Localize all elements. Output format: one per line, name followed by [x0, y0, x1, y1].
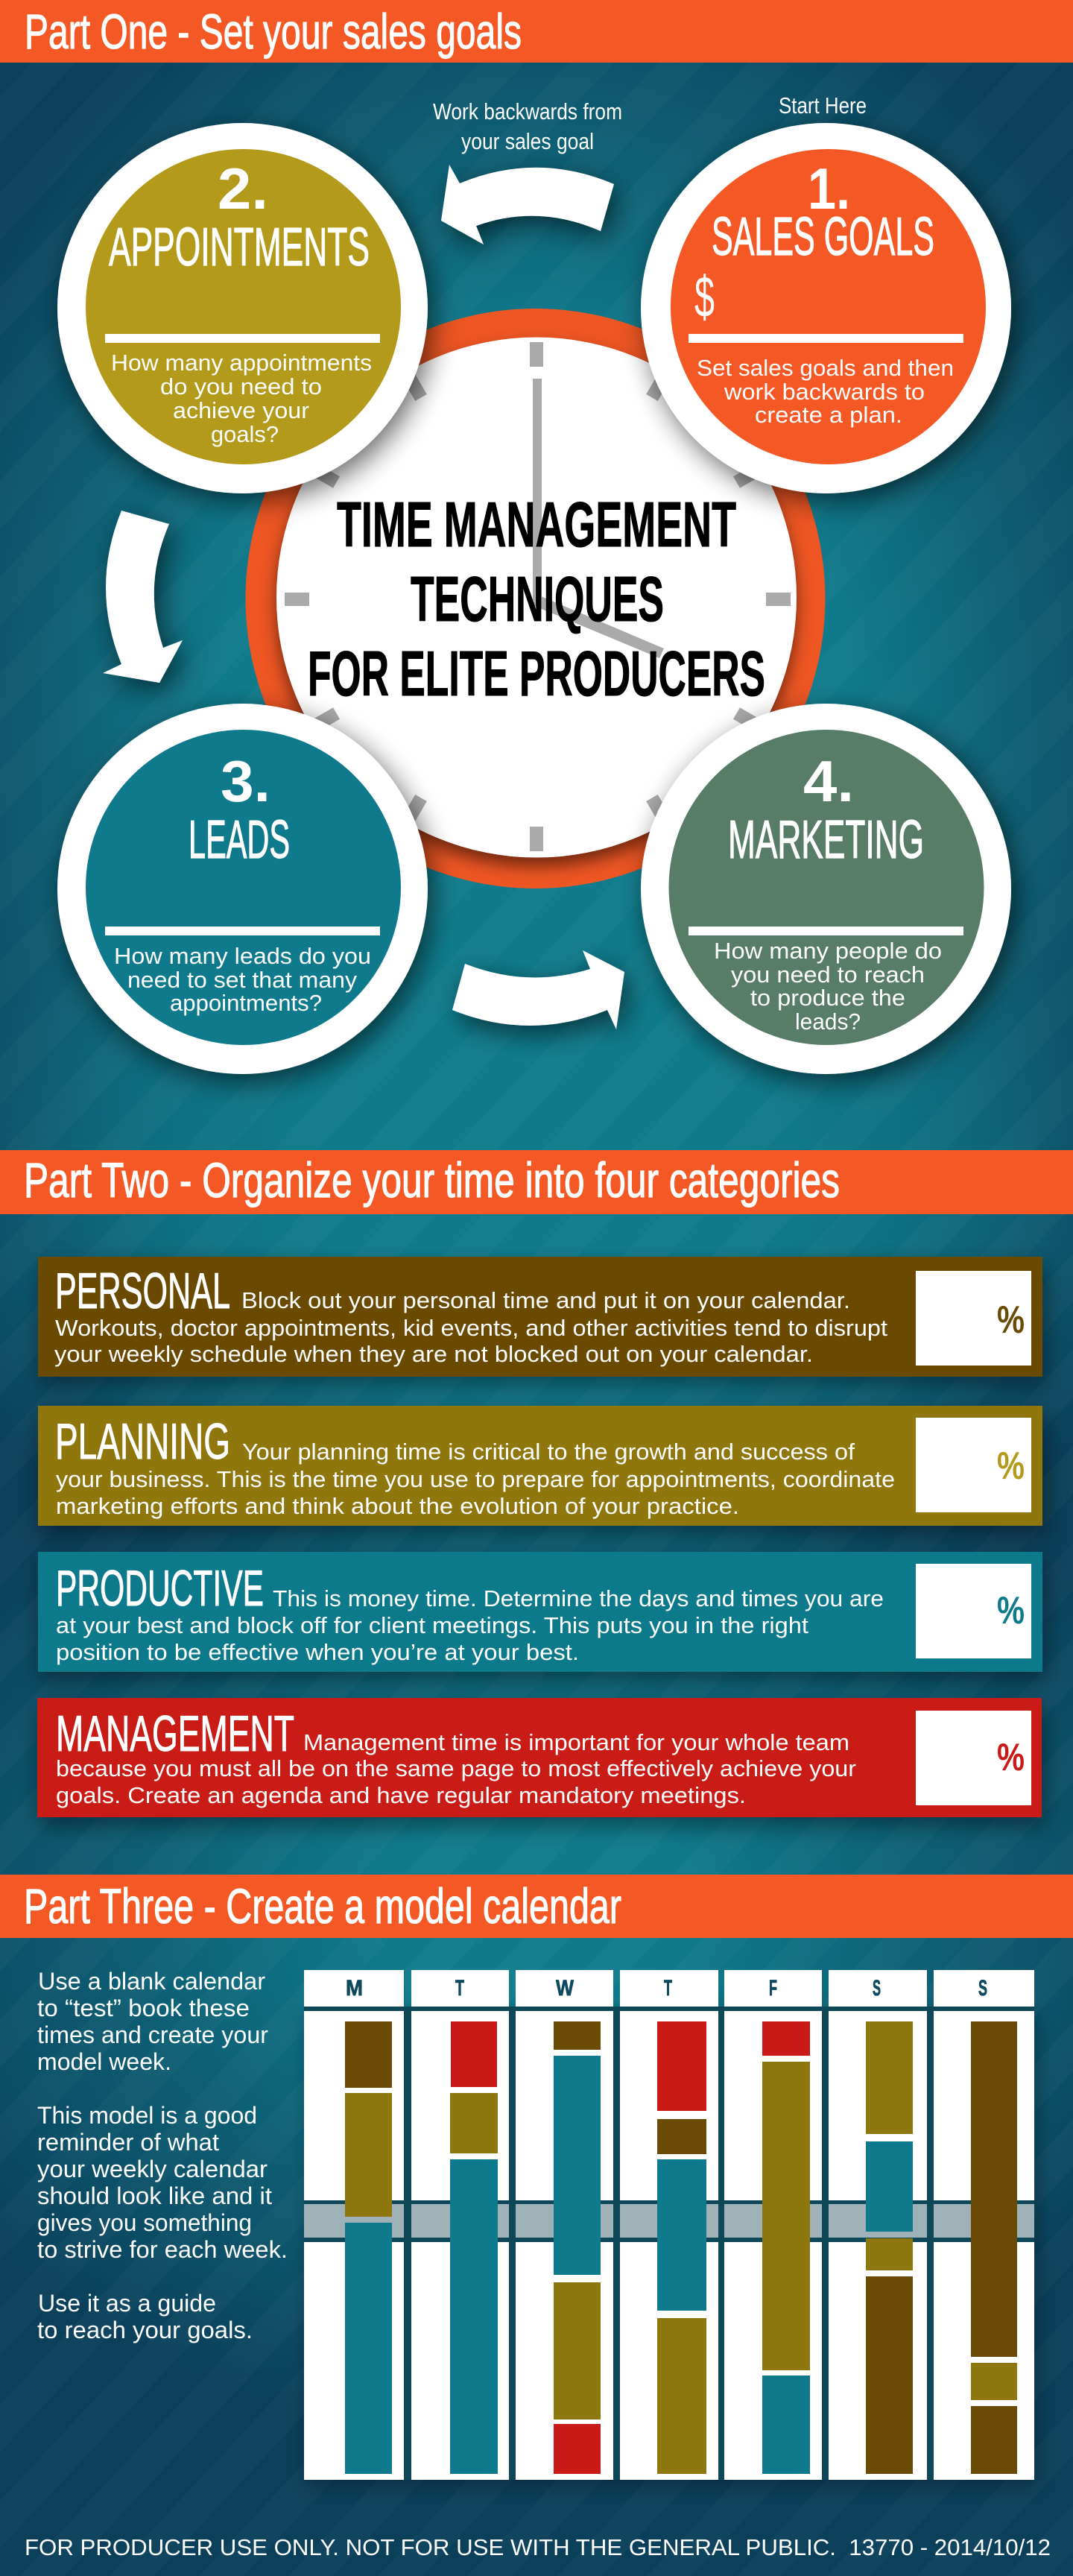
- model calendar: S: [978, 1976, 987, 2001]
- circle 1: sales goals: 1.: [808, 156, 850, 221]
- thursday bars: [657, 2021, 706, 2474]
- circle 1: sales goals: Set sales goals and then: [697, 355, 954, 381]
- panel: planning: PLANNING: [55, 1413, 230, 1470]
- panel: productive: position to be effective when you’re at your best.: [56, 1639, 579, 1665]
- panel: personal: [38, 1257, 1042, 1377]
- circle 3: leads: How many leads do you: [114, 943, 371, 969]
- saturday bars: [866, 2021, 913, 2474]
- circle 2: appointments: APPOINTMENTS: [109, 218, 370, 277]
- circle 4: marketing: 4.: [803, 748, 854, 814]
- circle 2: appointments: goals?: [211, 421, 279, 447]
- clock title: [308, 490, 765, 710]
- text: calendar instructions: gives you something: [37, 2209, 252, 2236]
- arrow: goals to appointments: [441, 165, 614, 244]
- note: work backwards: your sales goal: [461, 128, 594, 154]
- circle 4: marketing: you need to reach: [731, 962, 925, 988]
- circle 1: sales goals: create a plan.: [755, 402, 902, 428]
- circle 1: sales goals: work backwards to: [724, 379, 925, 405]
- text: calendar instructions: reminder of what: [37, 2129, 219, 2156]
- note: start here: Start Here: [779, 92, 867, 119]
- text: calendar instructions: should look like and it: [37, 2182, 272, 2209]
- panel: planning: Your planning time is critical to the growth and success of: [242, 1439, 855, 1465]
- clock title: FOR ELITE PRODUCERS: [308, 639, 765, 710]
- panel: management: because you must all be on the same page to most effectively achieve your: [56, 1755, 856, 1781]
- clock: [246, 309, 826, 888]
- note: work backwards: Work backwards from: [433, 98, 622, 124]
- circle 4: marketing: leads?: [795, 1008, 861, 1035]
- header: part one: [0, 0, 1073, 63]
- model calendar: S: [873, 1976, 881, 2001]
- panel: productive: [38, 1552, 1042, 1672]
- panel: planning: %: [997, 1445, 1025, 1488]
- circle 4: marketing: MARKETING: [728, 810, 924, 870]
- circle 3: leads: 3.: [221, 748, 270, 814]
- circle 1: sales goals: [641, 123, 1011, 493]
- panel: management: MANAGEMENT: [56, 1705, 294, 1762]
- model calendar: [304, 1970, 1034, 2480]
- text: calendar instructions: to reach your goals.: [37, 2317, 253, 2343]
- text: calendar instructions: Use a blank calendar: [38, 1968, 265, 1995]
- text: calendar instructions: Use it as a guide: [38, 2290, 216, 2317]
- sunday bars: [971, 2021, 1017, 2474]
- text: calendar instructions: your weekly calendar: [37, 2156, 268, 2182]
- panel: personal: Block out your personal time and put it on your calendar.: [241, 1287, 850, 1313]
- header: part three: [0, 1875, 1073, 1938]
- circle 2: appointments: How many appointments: [111, 350, 372, 376]
- arrow: appointments to leads: [103, 511, 183, 683]
- clock title: TIME MANAGEMENT: [337, 490, 736, 561]
- model calendar: F: [769, 1976, 777, 2001]
- model calendar: T: [664, 1976, 672, 2001]
- model calendar: W: [556, 1976, 575, 2001]
- text: calendar instructions: This model is a good: [37, 2102, 257, 2129]
- note: work backwards: [433, 98, 622, 154]
- panel: personal: Workouts, doctor appointments, kid events, and other activities tend to disrupt: [55, 1315, 887, 1341]
- circle 3: leads: need to set that many: [127, 967, 358, 993]
- header: part one: Part One - Set your sales goals: [25, 4, 522, 59]
- circle 3: leads: appointments?: [170, 990, 322, 1016]
- circle 4: marketing: to produce the: [750, 985, 905, 1011]
- circle 2: appointments: [57, 123, 428, 493]
- panel: planning: marketing efforts and think about the evolution of your practice.: [56, 1493, 739, 1519]
- text: calendar instructions: to “test” book these: [37, 1995, 250, 2021]
- panel: planning: your business. This is the time you use to prepare for appointments, coordinate: [56, 1466, 895, 1492]
- circle 2: appointments: achieve your: [173, 397, 309, 423]
- panel: planning: [38, 1406, 1042, 1526]
- panel: productive: PRODUCTIVE: [56, 1560, 264, 1617]
- friday bars: [762, 2021, 810, 2474]
- text: calendar instructions: times and create your: [37, 2021, 268, 2048]
- panel: personal: PERSONAL: [55, 1263, 230, 1319]
- panel: management: %: [997, 1736, 1025, 1779]
- text: calendar instructions: model week.: [37, 2048, 171, 2075]
- panel: personal: %: [997, 1298, 1025, 1342]
- model calendar: T: [455, 1976, 464, 2001]
- footer disclaimer: FOR PRODUCER USE ONLY. NOT FOR USE WITH THE GENERAL PUBLIC. 13770 - 2014/10/12: [25, 2534, 1051, 2560]
- panel: management: goals. Create an agenda and have regular mandatory meetings.: [56, 1782, 746, 1808]
- monday bars: [345, 2021, 392, 2474]
- circle 2: appointments: 2.: [218, 156, 268, 221]
- tuesday bars: [450, 2021, 498, 2474]
- wednesday bars: [554, 2021, 601, 2474]
- text: calendar instructions: to strive for each week.: [37, 2236, 288, 2263]
- model calendar: M: [346, 1976, 363, 2001]
- panel: productive: at your best and block off for client meetings. This puts you in the right: [56, 1612, 808, 1638]
- circle 4: marketing: How many people do: [714, 938, 942, 964]
- circle 4: marketing: [641, 704, 1011, 1074]
- circle 3: leads: LEADS: [189, 810, 290, 870]
- panel: productive: %: [997, 1589, 1025, 1632]
- circle 1: sales goals: $: [694, 264, 715, 329]
- clock title: TECHNIQUES: [411, 564, 664, 635]
- panel: productive: This is money time. Determine the days and times you are: [273, 1585, 884, 1611]
- panel: personal: your weekly schedule when they are not blocked out on your calendar.: [54, 1341, 813, 1367]
- circle 2: appointments: do you need to: [160, 373, 322, 400]
- arrow: leads to marketing: [452, 950, 624, 1029]
- circle 3: leads: [57, 704, 428, 1074]
- panel: management: [37, 1698, 1042, 1817]
- header: part three: Part Three - Create a model calendar: [24, 1878, 621, 1933]
- text: calendar instructions: [37, 1968, 288, 2343]
- panel: management: Management time is important for your whole team: [303, 1729, 849, 1755]
